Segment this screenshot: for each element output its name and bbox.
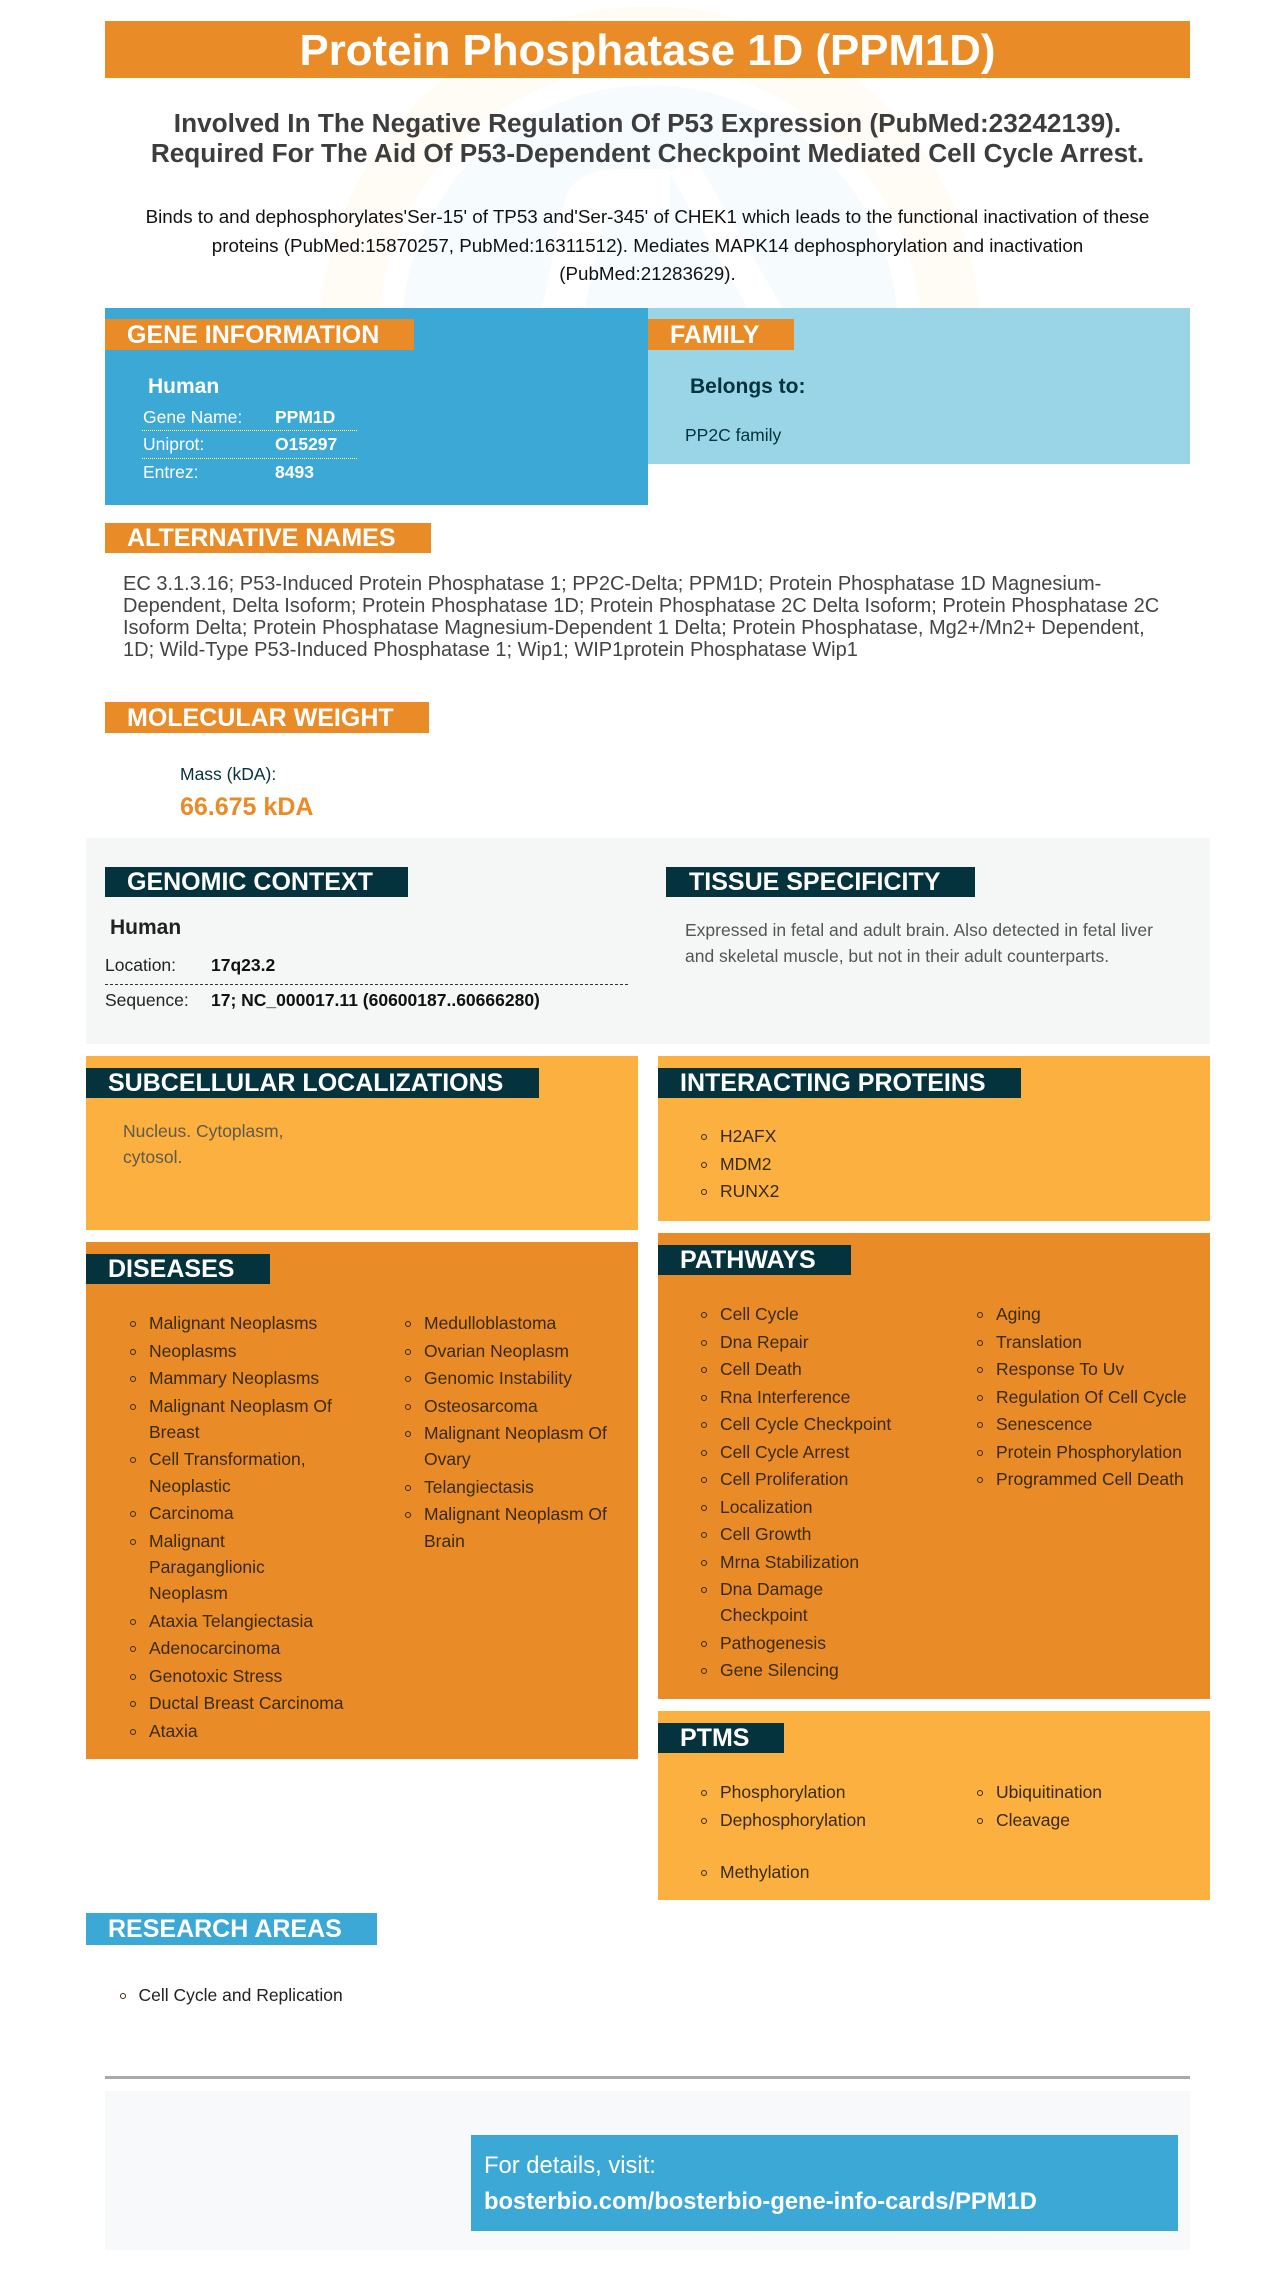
panel: genomic context and tissue specificity [86,838,1210,1044]
heading: diseases [86,1254,270,1284]
disease list column 2: Malignant Neoplasm Of [424,1423,607,1443]
ptm list column 2: Ubiquitination [996,1782,1102,1802]
ptm list column 1 [701,1782,866,1882]
sequence row [105,990,540,1010]
disease list column 2: Medulloblastoma [424,1313,556,1333]
panel: gene information [105,308,648,505]
subtitle [151,108,1144,168]
title: Protein Phosphatase 1D (PPM1D) [299,26,996,75]
location row: Location: [105,955,176,975]
disease list column 2: Ovarian Neoplasm [424,1341,569,1361]
mass label: Mass (kDA): [180,764,276,784]
ptm list column 1: Methylation [720,1862,810,1882]
panel: interacting proteins [658,1056,1210,1221]
disease list column 2: Osteosarcoma [424,1396,538,1416]
tissue specificity text [685,920,1153,966]
location row [105,955,275,975]
gene name row [142,407,357,431]
pathway list column 1: Pathogenesis [720,1633,826,1653]
disease list column 1: Malignant Neoplasm Of [149,1396,332,1416]
details label: For details, visit: [484,2152,656,2179]
disease list column 1: Carcinoma [149,1503,234,1523]
pathway list column 1 [701,1304,892,1680]
subtitle: Required For The Aid Of P53-Dependent Checkpoint Mediated Cell Cycle Arrest. [151,138,1144,168]
panel: footer [105,2091,1190,2250]
pathway list column 2: Translation [996,1332,1082,1352]
panel: subcellular localizations [86,1056,638,1230]
heading: genomic context: GENOMIC CONTEXT [127,868,373,896]
pathway list column 2: Response To Uv [996,1359,1124,1379]
disease list column 1: Adenocarcinoma [149,1638,280,1658]
ptm list column 2: Cleavage [996,1810,1070,1830]
ptm list column 2 [977,1782,1102,1830]
disease list column 1: Neoplastic [149,1476,231,1496]
entrez row [143,462,314,482]
disease list column 1: Genotoxic Stress [149,1666,282,1686]
subtitle: Involved In The Negative Regulation Of P53 Expression (PubMed:23242139). [174,108,1121,138]
pathway list column 2 [977,1304,1187,1489]
uniprot row: O15297 [275,434,337,454]
heading: family [648,319,794,350]
pathway list column 1: Cell Cycle Checkpoint [720,1414,891,1434]
belongs to label: Belongs to: [690,375,806,398]
panel: genomic context and tissue specificity: 17; NC_000017.11 (60600187..60666280) [211,990,540,1010]
pathway list column 1: Cell Proliferation [720,1469,848,1489]
pathway list column 2: Protein Phosphorylation [996,1442,1182,1462]
panel: pathways [658,1233,1210,1699]
disease list column 1: Neoplasm [149,1583,228,1603]
heading: pathways [658,1245,851,1275]
heading: gene information: GENE INFORMATION [127,321,379,349]
heading: tissue specificity: TISSUE SPECIFICITY [689,868,940,896]
pathway list column 1: Cell Growth [720,1524,811,1544]
pathway list column 1: Dna Repair [720,1332,809,1352]
pathway list column 2: Senescence [996,1414,1092,1434]
localization text: Nucleus. Cytoplasm, [123,1121,283,1141]
heading: pathways: PATHWAYS [680,1246,816,1274]
pathway list column 1: Cell Death [720,1359,802,1379]
protein list: H2AFX [720,1126,776,1146]
heading: ptms [658,1723,784,1753]
gene name row: PPM1D [275,407,335,427]
pathway list column 2: Regulation Of Cell Cycle [996,1387,1187,1407]
pathway list column 1: Checkpoint [720,1605,808,1625]
pathway list column 2: Aging [996,1304,1041,1324]
heading: ptms: PTMS [680,1724,749,1752]
ptm list column 1: Phosphorylation [720,1782,846,1802]
alternative names text: EC 3.1.3.16; P53-Induced Protein Phosphatase 1; PP2C-Delta; PPM1D; Protein Phosphatase 1D Magnesium- [123,573,1101,595]
alternative names text: Dependent, Delta Isoform; Protein Phosphatase 1D; Protein Phosphatase 2C Delta Isoform; Protein Phosphatase 2C [123,595,1159,617]
pathway list column 1: Cell Cycle [720,1304,799,1324]
entrez row: 8493 [275,462,314,482]
description: proteins (PubMed:15870257, PubMed:16311512). Mediates MAPK14 dephosphorylation and inactivation [212,234,1083,256]
disease list column 1: Neoplasms [149,1341,237,1361]
disease list column 2: Ovary [424,1449,471,1469]
callout: details link [471,2135,1178,2231]
disease list column 2: Malignant Neoplasm Of [424,1504,607,1524]
family value: PP2C family [685,425,781,445]
gene name row: Gene Name: [143,407,242,427]
uniprot row [142,434,357,459]
sequence row: Sequence: [105,990,189,1010]
pathway list column 1: Localization [720,1497,812,1517]
panel: genomic context and tissue specificity: 17q23.2 [211,955,275,975]
disease list column 1: Ataxia Telangiectasia [149,1611,313,1631]
disease list column 1: Breast [149,1422,200,1442]
protein list [701,1126,779,1201]
disease list column 1: Malignant [149,1531,225,1551]
pathway list column 1: Rna Interference [720,1387,850,1407]
heading: subcellular localizations: SUBCELLULAR LOCALIZATIONS [108,1069,503,1097]
protein list: RUNX2 [720,1181,779,1201]
disease list column 1: Ductal Breast Carcinoma [149,1693,344,1713]
alternative names text [123,573,1159,661]
disease list column 1: Cell Transformation, [149,1449,306,1469]
disease list column 2: Brain [424,1531,465,1551]
entrez row: Entrez: [143,462,198,482]
disease list column 1: Ataxia [149,1721,198,1741]
disease list column 2: Genomic Instability [424,1368,572,1388]
research areas list: Cell Cycle and Replication [138,1985,343,2005]
heading: molecular weight: MOLECULAR WEIGHT [127,704,394,732]
heading: research areas: RESEARCH AREAS [108,1915,342,1943]
pathway list column 1: Cell Cycle Arrest [720,1442,849,1462]
description: Binds to and dephosphorylates'Ser-15' of TP53 and'Ser-345' of CHEK1 which leads to the functional inactivation of these [146,206,1149,227]
protein list: MDM2 [720,1154,772,1174]
pathway list column 1: Dna Damage [720,1579,823,1599]
heading: family: FAMILY [670,321,759,349]
title [105,21,1190,78]
alternative names text: 1D; Wild-Type P53-Induced Phosphatase 1; Wip1; WIP1protein Phosphatase Wip1 [123,639,858,661]
alternative names text: Isoform Delta; Protein Phosphatase Magnesium-Dependent 1 Delta; Protein Phosphatase, Mg2+/Mn2+ Dependent, [123,617,1145,639]
ptm list column 1: Dephosphorylation [720,1810,866,1830]
pathway list column 1: Mrna Stabilization [720,1552,859,1572]
pathway list column 2: Programmed Cell Death [996,1469,1184,1489]
tissue specificity text: and skeletal muscle, but not in their adult counterparts. [685,946,1109,966]
localization text: cytosol. [123,1147,182,1167]
heading: diseases: DISEASES [108,1255,234,1283]
species label: Human [148,375,219,398]
disease list column 2: Telangiectasis [424,1477,534,1497]
panel: diseases [86,1242,638,1759]
description [146,206,1149,284]
divider [105,984,630,985]
heading: interacting proteins: INTERACTING PROTEINS [680,1069,986,1097]
disease list column 1: Paraganglionic [149,1557,265,1577]
mass value: 66.675 kDA [180,793,313,821]
disease list column 1: Malignant Neoplasms [149,1313,317,1333]
heading: alternative names: ALTERNATIVE NAMES [127,524,396,552]
details url: bosterbio.com/bosterbio-gene-info-cards/PPM1D [484,2188,1037,2215]
panel: ptms [658,1711,1210,1900]
pathway list column 1: Gene Silencing [720,1660,839,1680]
species label: Human [110,916,181,939]
panel: family [648,308,1190,464]
footer rule [105,2076,1190,2079]
background watermark logo [321,6,979,308]
localization text [123,1121,283,1167]
tissue specificity text: Expressed in fetal and adult brain. Also detected in fetal liver [685,920,1153,940]
disease list column 1 [130,1313,344,1741]
disease list column 2 [405,1313,607,1551]
description: (PubMed:21283629). [559,263,736,284]
disease list column 1: Mammary Neoplasms [149,1368,319,1388]
uniprot row: Uniprot: [143,434,204,454]
